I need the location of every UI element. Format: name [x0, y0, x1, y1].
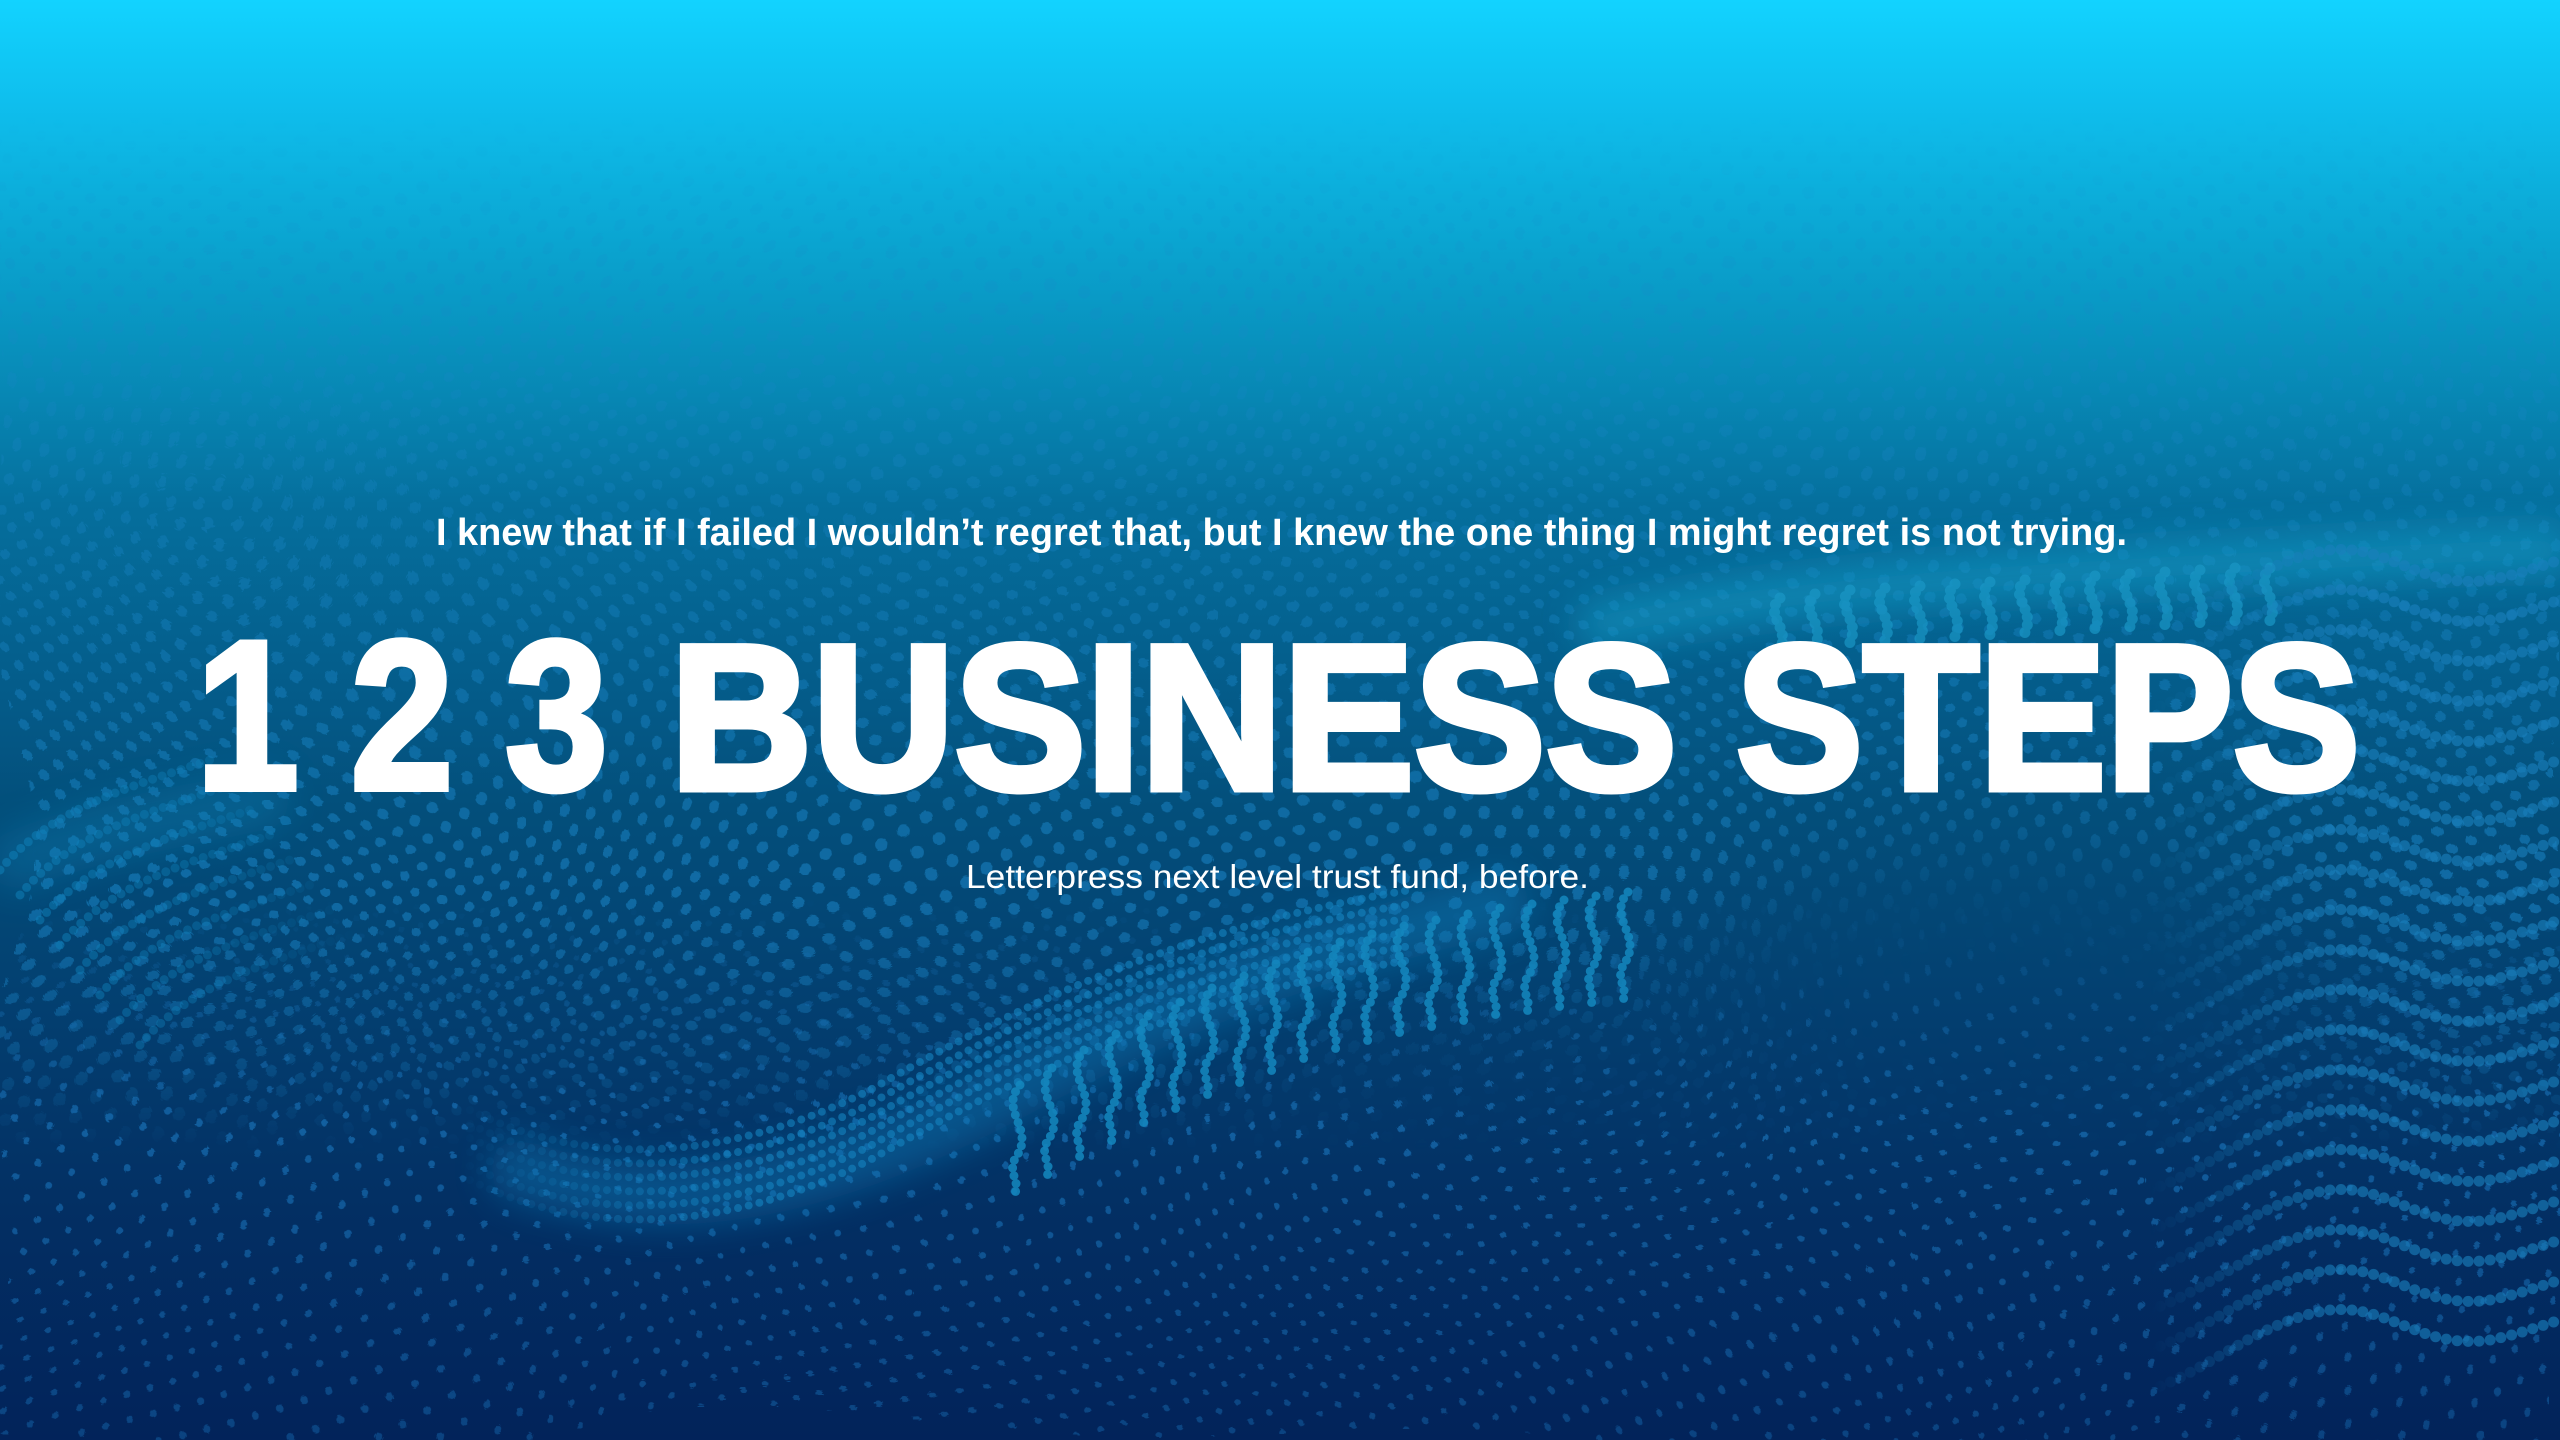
right side wavy lines	[2150, 549, 2560, 1390]
subtitle: Letterpress next level trust fund, before.	[966, 858, 1589, 895]
hanging wavy strands below the ridge	[1013, 892, 1630, 1195]
title: BUSINESS	[670, 602, 1677, 833]
dotted wave texture	[0, 444, 2560, 1120]
left side wavy lines	[0, 756, 305, 1050]
short strands below the upper ridge	[1774, 568, 2273, 654]
title	[196, 597, 2360, 835]
title: STEPS	[1736, 602, 2360, 833]
small sparse dots at the bottom	[0, 935, 2560, 1440]
quote line: I knew that if I failed I wouldn’t regret that, but I knew the one thing I might regret is not trying.	[436, 512, 2127, 554]
soft glow of the wave ridges	[20, 550, 2550, 1194]
dense dotted ridge band	[470, 890, 1410, 1219]
title: 1 2 3	[196, 597, 608, 835]
